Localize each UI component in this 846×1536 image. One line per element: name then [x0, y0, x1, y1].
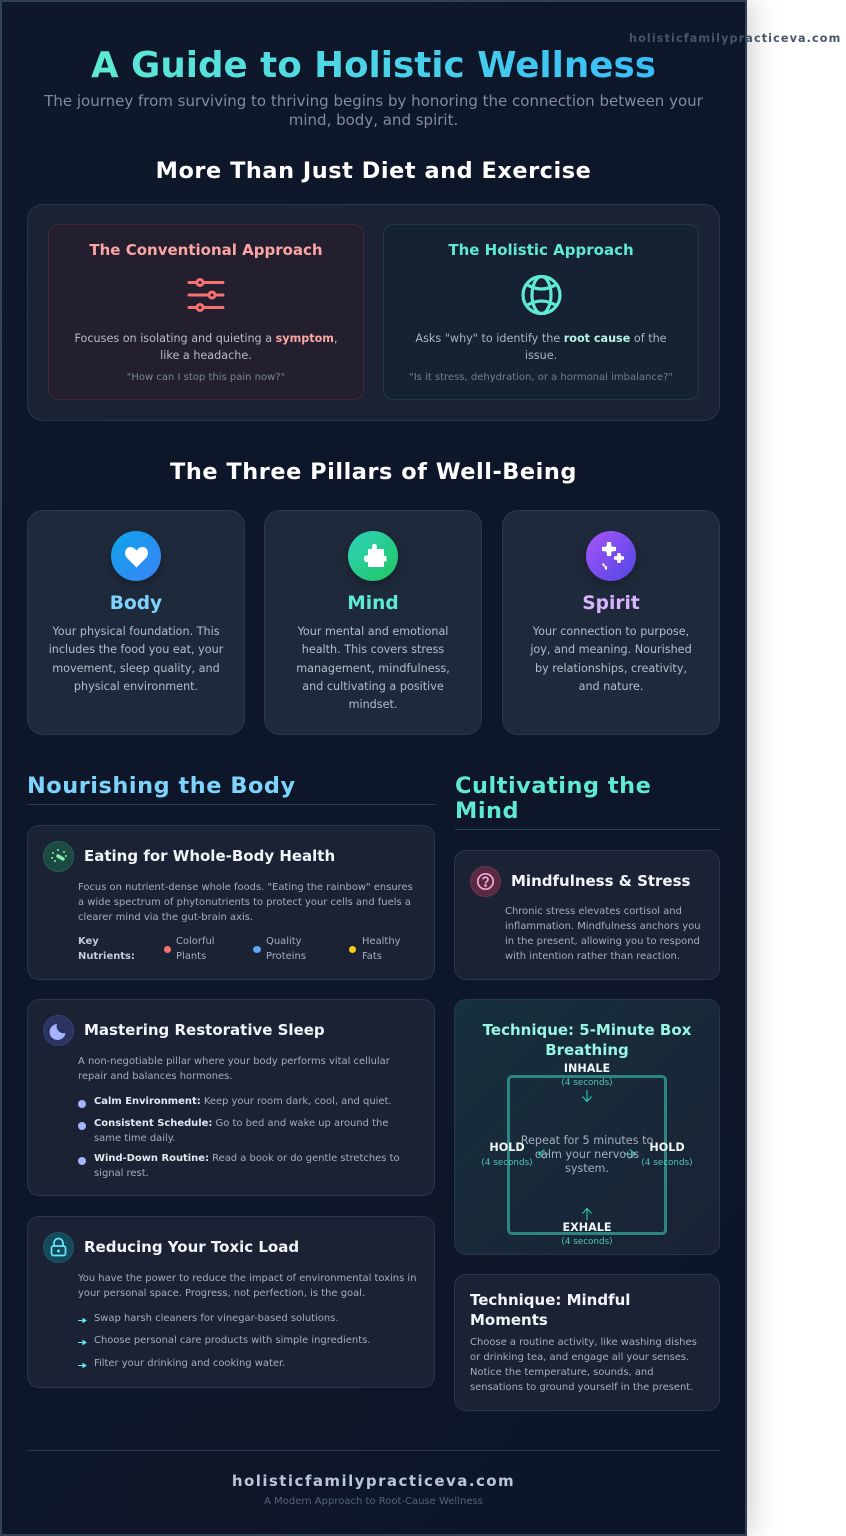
- text: sleep: [78, 1056, 390, 1082]
- legend dot: proteins: [253, 946, 261, 953]
- subtitle: mind, body, and spirit.: [289, 111, 458, 129]
- label: inhale: INHALE: [564, 1062, 610, 1075]
- panel: holistic approach: [383, 224, 699, 400]
- text: mindful moments: Notice the temperature, sounds, and: [470, 1367, 654, 1378]
- text: mindful moments: [470, 1337, 697, 1393]
- text: eating: [78, 882, 413, 923]
- heading: three pillars: The Three Pillars of Well-Being: [170, 459, 577, 485]
- icon: puzzle: [348, 531, 398, 581]
- list bullet: [78, 1122, 86, 1130]
- text: eating: clearer mind via the gut-brain axis.: [78, 912, 253, 923]
- icon: question: [470, 866, 501, 897]
- text: spirit: joy, and meaning. Nourished: [530, 643, 692, 656]
- text: mind: Your mental and emotional: [298, 625, 448, 638]
- heading: cultivating the mind: Mind: [455, 798, 519, 824]
- heading: box breathing: Breathing: [545, 1041, 629, 1059]
- text: body: physical environment.: [74, 680, 198, 693]
- icon: food: [43, 841, 74, 872]
- text: mind: and cultivating a positive: [302, 680, 444, 693]
- legend title: Key: [78, 936, 99, 947]
- legend text: fats: [362, 936, 401, 962]
- arrow: [78, 1318, 87, 1324]
- list item: water: Filter your drinking and cooking water.: [94, 1358, 285, 1369]
- list item: wind-down: signal rest.: [94, 1168, 149, 1179]
- text: breathing center: calm your nervous: [535, 1148, 639, 1161]
- text: holistic quote: "Is it stress, dehydration, or a hormonal imbalance?": [409, 372, 673, 383]
- heading: spirit: Spirit: [582, 593, 640, 614]
- panel: conventional approach: [48, 224, 364, 400]
- label: inhale seconds: (4 seconds): [561, 1078, 613, 1088]
- text: holistic description: Asks "why" to identify the root cause of the: [415, 332, 667, 345]
- text: body: includes the food you eat, your: [49, 643, 223, 656]
- panel: body pillar: [27, 510, 245, 735]
- heading: mindful moments: Moments: [470, 1311, 548, 1329]
- watermark: holisticfamilypracticeva.com: [629, 32, 841, 45]
- label: hold right seconds: (4 seconds): [641, 1158, 693, 1168]
- text: mind: health. This covers stress: [302, 643, 444, 656]
- heading: mindfulness: Mindfulness & Stress: [511, 872, 690, 890]
- icon: heart: [111, 531, 161, 581]
- text: spirit: by relationships, creativity,: [535, 662, 687, 675]
- footer site name: holisticfamilypracticeva.com: [232, 1472, 515, 1490]
- text: conventional quote: "How can I stop this pain now?": [127, 372, 285, 383]
- panel: sleep: [27, 999, 435, 1196]
- heading: holistic: The Holistic Approach: [448, 241, 634, 259]
- text: body: [49, 625, 224, 693]
- text: spirit: Your connection to purpose,: [533, 625, 689, 638]
- subtitle: The journey from surviving to thriving begins by honoring the connection between your: [44, 92, 703, 110]
- text: breathing center: Repeat for 5 minutes to: [521, 1134, 653, 1147]
- text: conventional description: like a headache.: [160, 349, 252, 362]
- legend text: proteins: Proteins: [266, 951, 306, 962]
- legend: key nutrients: [78, 936, 401, 962]
- legend text: plants: Colorful: [176, 936, 215, 947]
- text: mindfulness: in the present, allowing you to respond: [505, 936, 700, 947]
- label: exhale seconds: (4 seconds): [561, 1237, 613, 1247]
- text: body: Your physical foundation. This: [52, 625, 220, 638]
- text: holistic description: issue.: [525, 349, 557, 362]
- text: mind: management, mindfulness,: [296, 662, 450, 675]
- heading: cultivating the mind: [455, 774, 720, 830]
- text: sleep: repair and balances hormones.: [78, 1071, 232, 1082]
- heading: conventional: The Conventional Approach: [89, 241, 323, 259]
- label: hold right: HOLD: [649, 1141, 685, 1154]
- panel: mind pillar: [264, 510, 482, 735]
- label: hold left seconds: (4 seconds): [481, 1158, 533, 1168]
- text: toxic load: [78, 1273, 416, 1299]
- heading: box breathing: [482, 1021, 691, 1059]
- heading: sleep: Mastering Restorative Sleep: [84, 1021, 325, 1039]
- list item: schedule: [94, 1118, 388, 1144]
- text: mind: [296, 625, 450, 711]
- text: conventional description: [74, 332, 338, 362]
- legend text: plants: Plants: [176, 951, 206, 962]
- text: mindfulness: inflammation. Mindfulness anchors you: [505, 921, 701, 932]
- text: body: movement, sleep quality, and: [52, 662, 220, 675]
- legend text: fats: Healthy: [362, 936, 401, 947]
- text: toxic load: your personal space. Progress, not perfection, is the goal.: [78, 1288, 365, 1299]
- arrow: [78, 1362, 87, 1368]
- text: mindful moments: or drinking tea, and engage all your senses.: [470, 1352, 689, 1363]
- list item: wind-down: [94, 1153, 400, 1179]
- footer tagline: A Modern Approach to Root-Cause Wellness: [264, 1496, 483, 1507]
- icon: sparkles: [586, 531, 636, 581]
- panel: comparison: [27, 204, 720, 421]
- heading: nourishing the body: [27, 771, 435, 805]
- heading: body: Body: [110, 593, 162, 614]
- icon: lock: [43, 1232, 74, 1263]
- heading: more than diet: More Than Just Diet and Exercise: [156, 158, 591, 184]
- legend dot: fats: [349, 946, 356, 953]
- panel: toxic load: [27, 1216, 435, 1388]
- heading: toxic load: Reducing Your Toxic Load: [84, 1238, 299, 1256]
- subtitle: [44, 92, 703, 129]
- heading: mind: Mind: [347, 593, 399, 614]
- list item: schedule: same time daily.: [94, 1133, 175, 1144]
- text: holistic description: [415, 332, 667, 362]
- text: sleep: A non-negotiable pillar where your body performs vital cellular: [78, 1056, 390, 1067]
- legend text: plants: [176, 936, 215, 962]
- heading: mindful moments: Technique: Mindful: [470, 1291, 630, 1309]
- heading: eating: Eating for Whole-Body Health: [84, 847, 335, 865]
- panel: eating: [27, 825, 435, 980]
- panel: spirit pillar: [502, 510, 720, 735]
- text: mindfulness: with intention rather than reaction.: [505, 951, 680, 962]
- text: breathing center: [521, 1134, 653, 1175]
- legend text: proteins: [266, 936, 306, 962]
- legend title: [78, 936, 135, 962]
- panel: mindful moments: [454, 1274, 720, 1411]
- panel: box breathing: [454, 999, 720, 1255]
- text: spirit: [530, 625, 692, 693]
- legend text: fats: Fats: [362, 951, 382, 962]
- list bullet: [78, 1157, 86, 1165]
- text: eating: a wide spectrum of phytonutrients to protect your cells and fuels a: [78, 897, 411, 908]
- text: mindful moments: Choose a routine activity, like washing dishes: [470, 1337, 697, 1348]
- heading: mindful moments: [470, 1291, 630, 1329]
- icon: globe: [521, 274, 562, 316]
- text: spirit: and nature.: [579, 680, 643, 693]
- footer divider: [27, 1450, 720, 1451]
- icon: moon: [43, 1015, 74, 1046]
- arrow: up: [582, 1208, 592, 1220]
- panel: mindfulness: [454, 850, 720, 980]
- list item: cleaners: Swap harsh cleaners for vinegar-based solutions.: [94, 1313, 339, 1324]
- title: A Guide to Holistic Wellness: [91, 45, 656, 86]
- list item: personal care: Choose personal care products with simple ingredients.: [94, 1335, 370, 1346]
- label: hold left: HOLD: [489, 1141, 525, 1154]
- arrow: down: [582, 1090, 592, 1102]
- arrow: left: [538, 1149, 550, 1159]
- heading: nourishing the body: Nourishing the Body: [27, 773, 296, 799]
- list item: schedule: Consistent Schedule: Go to bed and wake up around the: [94, 1118, 388, 1129]
- heading: cultivating the mind: Cultivating the: [455, 773, 651, 799]
- legend dot: plants: [164, 946, 171, 953]
- text: toxic load: You have the power to reduce the impact of environmental toxins in: [78, 1273, 416, 1284]
- text: mindful moments: sensations to ground yourself in the present.: [470, 1382, 693, 1393]
- diagram: breathing box: [507, 1075, 667, 1235]
- legend title: Nutrients:: [78, 951, 135, 962]
- text: mindfulness: Chronic stress elevates cortisol and: [505, 906, 682, 917]
- list item: wind-down: Wind-Down Routine: Read a book or do gentle stretches to: [94, 1153, 400, 1164]
- icon: sliders: [188, 278, 224, 312]
- heading: box breathing: Technique: 5-Minute Box: [483, 1021, 691, 1039]
- text: eating: Focus on nutrient-dense whole foods. "Eating the rainbow" ensures: [78, 882, 413, 893]
- arrow: right: [624, 1149, 636, 1159]
- text: mind: mindset.: [349, 698, 397, 711]
- text: mindfulness: [505, 906, 701, 962]
- legend text: proteins: Quality: [266, 936, 302, 947]
- label: exhale: EXHALE: [562, 1221, 612, 1234]
- text: conventional description: Focuses on isolating and quieting a symptom,: [74, 332, 338, 345]
- list bullet: [78, 1100, 86, 1108]
- arrow: [78, 1340, 87, 1346]
- text: breathing center: system.: [565, 1162, 609, 1175]
- list item: calm: Calm Environment: Keep your room dark, cool, and quiet.: [94, 1096, 392, 1107]
